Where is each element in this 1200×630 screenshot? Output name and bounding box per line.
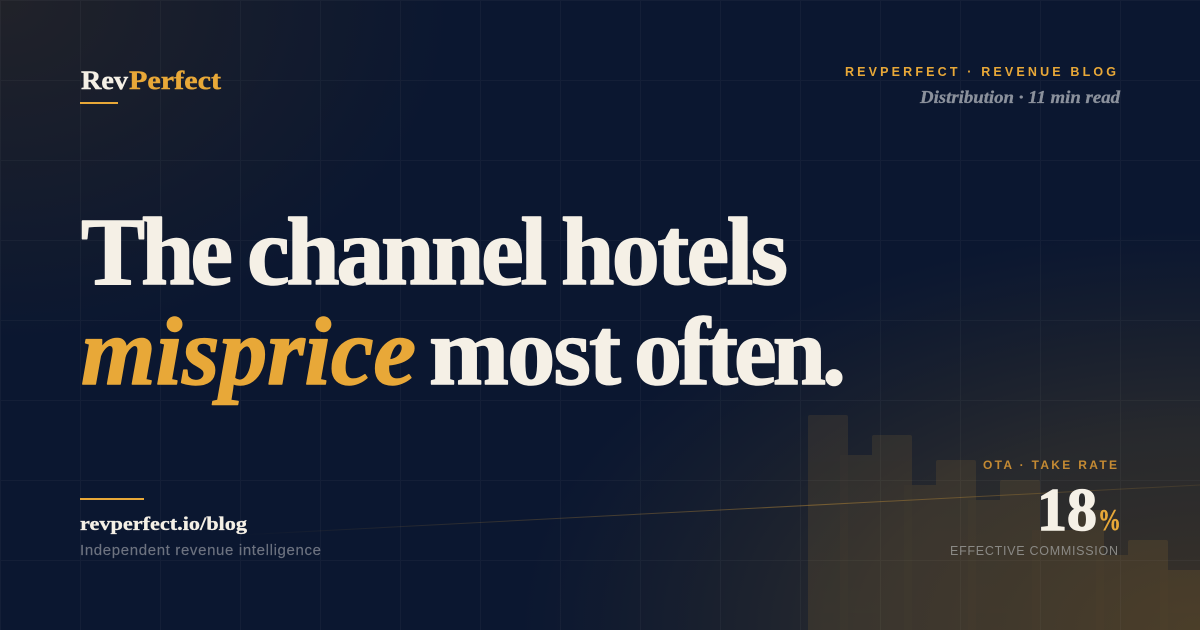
logo: Rev: [81, 66, 128, 95]
logo: [81, 66, 221, 95]
headline line 2: often.: [634, 298, 846, 405]
site url: revperfect.io/blog: [80, 514, 248, 535]
logo: Perfect: [129, 66, 221, 95]
headline line 1: [81, 198, 788, 305]
headline line 2: [81, 298, 846, 405]
stat percent sign: %: [1098, 502, 1121, 537]
stat value: 18: [1037, 477, 1097, 543]
stat label: OTA · TAKE RATE: [983, 458, 1117, 472]
stat caption: EFFECTIVE COMMISSION: [950, 544, 1118, 558]
headline line 1: The: [81, 198, 233, 305]
headline line 2: misprice: [81, 298, 416, 405]
blog eyebrow: REVPERFECT · REVENUE BLOG: [845, 65, 1116, 79]
stat block: [950, 458, 1121, 558]
tagline: Independent revenue intelligence: [80, 542, 321, 559]
headline: [81, 198, 846, 405]
headline line 1: channel: [247, 198, 547, 305]
bar chart: [808, 415, 1200, 630]
headline line 2: most: [429, 298, 621, 405]
trend line: [240, 485, 1200, 535]
logo underline: [80, 102, 118, 104]
footer rule: [80, 498, 144, 500]
headline line 1: hotels: [561, 198, 788, 305]
category and read time: Distribution · 11 min read: [919, 87, 1121, 107]
